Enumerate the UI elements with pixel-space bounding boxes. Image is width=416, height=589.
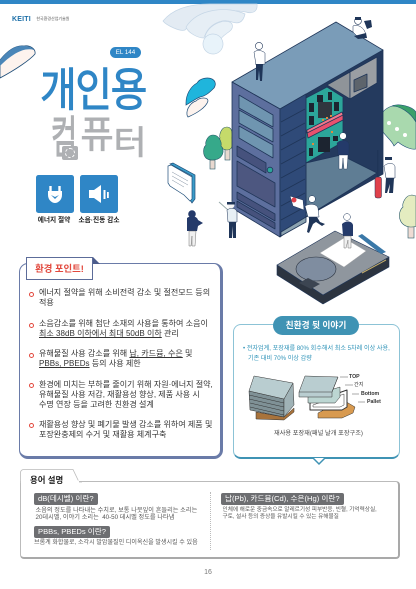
caption: energy saving: 에너지 절약 [38, 216, 70, 224]
title: 컴퓨터: 컴 [51, 112, 77, 163]
circuit board [306, 87, 343, 163]
front windows [239, 95, 273, 127]
heading: environment points: 환경 포인트! [35, 263, 84, 274]
term: dB: dB(데시벨) 이란? [38, 494, 94, 503]
text: point 3: 유해물질 사용 감소를 위해 납, 카드뮴, 수은 및 [39, 349, 192, 358]
tower front [232, 82, 280, 237]
caption: reusable packaging: 재사용 포장재(패널 날개 포장구조) [274, 430, 363, 437]
text: eco story: 기존 대비 70% 이상 감량 [248, 354, 312, 362]
definition: PBBs: 브롬계 화합물로, 소각시 발암물질인 디이옥신을 발생시킬 수 있음 [34, 540, 198, 546]
bullet 3 [28, 352, 34, 358]
text: point 2: 최소 38dB 이하에서 최대 50dB 이하 관리 [39, 329, 179, 338]
badge: EL 144 [110, 47, 141, 58]
caption: noise reduction: 소음·진동 감소 [78, 216, 120, 224]
text: point 3: PBBs, PBEDs 등의 사용 제한 [39, 359, 141, 368]
definition: lead cadmium mercury: 구토, 설사 등의 증상을 유발시킬 수 있는 유해물질 [222, 514, 339, 520]
label: pallet: Pallet [367, 398, 381, 404]
figure: man in navy [187, 210, 203, 246]
label: bottom: Bottom [361, 390, 379, 396]
icon: recycle arrows on title [62, 146, 78, 160]
exploded package [299, 376, 355, 418]
page number: 16 [204, 569, 212, 576]
figure: man on disk [342, 214, 353, 248]
figure: man with screwdriver [375, 150, 395, 198]
icon tile: noise reduction [80, 175, 118, 213]
text: point 2 [39, 319, 208, 338]
text: point 1 [39, 288, 210, 307]
title: 컴퓨터: 퓨 [80, 113, 114, 156]
tower interior [306, 50, 383, 217]
icon tile: energy saving [36, 175, 74, 213]
heading: environment points [26, 257, 93, 280]
definition: lead cadmium mercury: 인체에 해로운 중금속으로 알레르기성 피부반응, 빈혈, 기억력상실, [222, 507, 377, 513]
text: point 3 [39, 349, 192, 368]
text: point 4: 유해물질 사용 저감, 재활용성 향상, 제품 사용 시 [39, 390, 200, 399]
icon: wifi symbol [163, 4, 257, 57]
logo: KEITI: KEITI 한국환경산업기술원 [12, 16, 69, 23]
glossary tab [20, 469, 82, 483]
icon: trees [204, 127, 416, 238]
panel: eco story [233, 324, 400, 459]
heading: eco story [273, 316, 359, 335]
text: point 4: 수명 연장 등을 고려한 친환경 설계 [39, 400, 154, 409]
text: point 1: 에너지 절약을 위해 소비전력 감소 및 절전모드 등의 [39, 288, 210, 297]
figure: engineer inside tower [337, 133, 349, 169]
icon: panel pointer [313, 458, 325, 465]
vented side panel [280, 94, 306, 237]
figure: seated reader [353, 17, 372, 39]
red connector [307, 113, 343, 138]
panel: environment points [19, 263, 223, 459]
tower top [232, 22, 383, 109]
heading: eco story: 친환경 뒷 이야기 [286, 320, 346, 330]
top bar [0, 0, 416, 4]
term: PBBs: PBBs, PBEDs 이란? [38, 527, 106, 536]
icon: cloud left [0, 46, 35, 78]
bullet 2 [28, 322, 34, 328]
text: point 5: 재활용성 향상 및 폐기물 발생 감소를 위하여 제품 및 [39, 420, 212, 429]
figure: running man with megaphone [290, 196, 325, 233]
bullet 5 [28, 423, 34, 428]
icon: tab fold [93, 257, 100, 264]
title: 컴퓨터 [51, 112, 147, 163]
illustration: isometric computer scene [0, 4, 416, 304]
figure: man on tower top left [254, 42, 265, 81]
tower floor [306, 155, 377, 217]
text: point 4: 환경에 미치는 부하를 줄이기 위해 자원·에너지 절약, [39, 380, 213, 389]
diagram: packaging structure [248, 376, 365, 420]
drive bay [327, 72, 350, 99]
bullet 4 [28, 383, 34, 388]
stacked package [249, 376, 294, 420]
text: point 4 [39, 380, 213, 409]
text: point 5: 포장완충제의 수거 및 재활용 체계구축 [39, 430, 166, 439]
label: top: TOP [349, 374, 360, 380]
label: spacer: 간지 [354, 382, 364, 388]
icon: green speech bubble [379, 105, 416, 149]
panel: glossary [20, 481, 400, 559]
badge: EL 144: EL 144 [116, 49, 135, 56]
definition: lead cadmium mercury [222, 506, 377, 520]
title: 개인용: 개인용 [40, 66, 146, 116]
title: 컴퓨터: 터 [113, 124, 147, 161]
icon: speech bubble left [168, 163, 195, 203]
term: lead cadmium mercury: 납(Pb), 카드뮴(Cd), 수은(Hg) 이란? [225, 494, 340, 503]
leader lines [340, 377, 365, 402]
bullet 1 [28, 292, 34, 297]
hard disk [277, 231, 389, 304]
figure: man with pen [219, 202, 237, 238]
definition: dB: 소음의 정도를 나타내는 수치로, 보통 나뭇잎이 흔들리는 소리는 [36, 507, 197, 514]
definition: dB [36, 506, 197, 521]
definition: dB: 20데시벨, 이야기 소리는 40-50 데시벨 정도를 나타냄 [36, 514, 174, 521]
text: point 1: 적용 [39, 298, 54, 307]
icon: blue and white cloud [186, 78, 215, 117]
term: dB [34, 493, 98, 504]
text: eco story: • 전자업계, 포장재를 80% 회수해서 최소 5차례 이상 사용, [243, 344, 390, 352]
tower: computer case [232, 22, 383, 237]
heading: glossary: 용어 설명 [30, 475, 63, 485]
text: point 2: 소음감소를 위해 첨단 소재의 사용을 통하여 소음이 [39, 319, 208, 328]
dotted divider [210, 492, 211, 550]
text: point 5 [39, 420, 212, 439]
text: eco story [243, 344, 390, 362]
